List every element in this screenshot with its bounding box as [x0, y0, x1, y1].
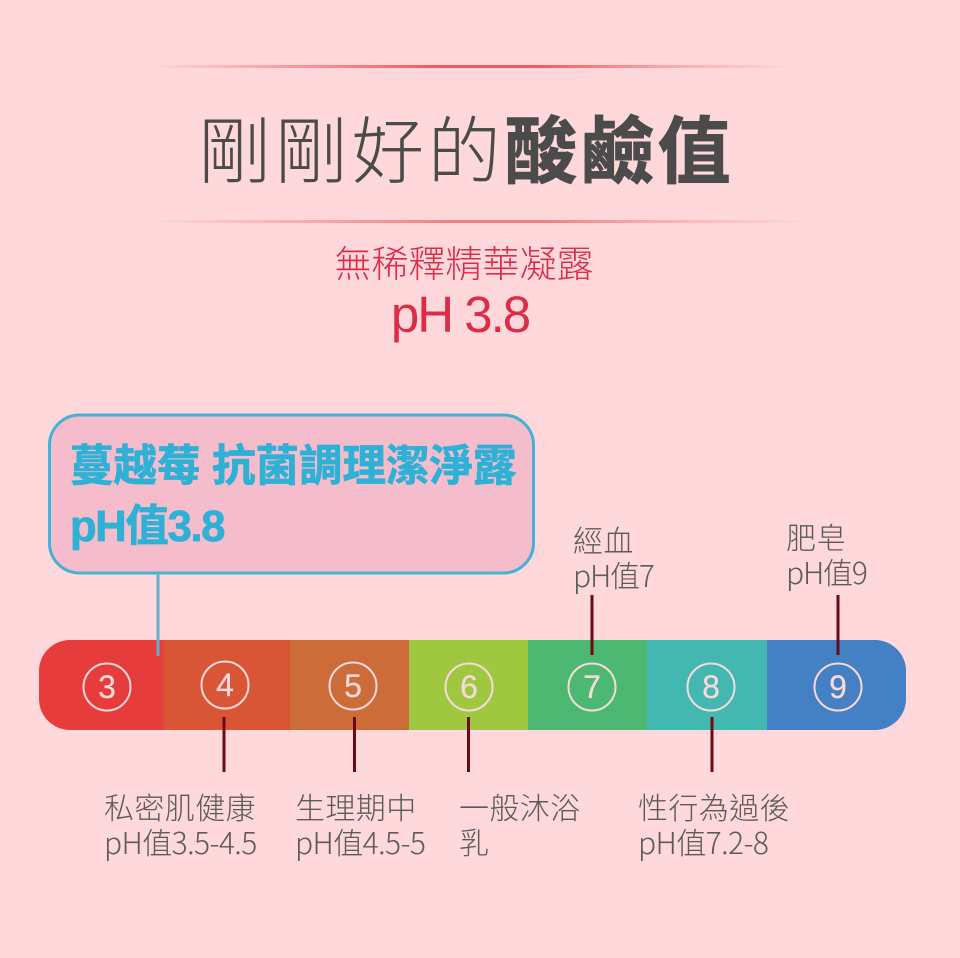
pointer: body wash — [467, 717, 470, 772]
label: intimate skin pH 3.5-4.5: 私密肌健康 — [104, 784, 256, 828]
label: after sex pH 7.2-8: pH值7.2-8 — [638, 819, 768, 863]
label: during period pH 4.5-5: pH值4.5-5 — [295, 819, 425, 863]
pointer: during period — [353, 717, 356, 772]
label: during period pH 4.5-5: 生理期中 — [295, 784, 417, 828]
scale mark 7: 7 — [583, 669, 601, 705]
label: after sex pH 7.2-8: 性行為過後 — [638, 784, 790, 828]
callout heading: 蔓越莓 — [70, 443, 200, 491]
callout heading: 抗菌調理潔淨露 — [212, 443, 516, 491]
label: body wash: 乳 — [459, 819, 489, 863]
pointer: soap — [836, 595, 840, 655]
scale mark 6 — [446, 664, 492, 710]
scale mark 5 — [330, 662, 376, 710]
label: menstrual blood pH 7: pH值7 — [573, 552, 654, 596]
callout connector — [156, 573, 160, 656]
pointer: after sex — [710, 717, 714, 772]
label: menstrual blood pH 7: 經血 — [573, 517, 634, 561]
product pH value: pH 3.8 — [391, 286, 530, 343]
pointer: intimate skin — [222, 717, 226, 772]
scale mark 7 — [568, 664, 616, 710]
label: soap pH 9: 肥皂 — [786, 514, 847, 558]
scale mark 8 — [688, 664, 734, 710]
scale mark 5: 5 — [344, 668, 362, 704]
scale mark 4 — [202, 662, 248, 708]
title: 剛剛好的酸鹼值 — [198, 112, 734, 193]
pointer: menstrual blood — [590, 595, 594, 655]
scale mark 3 — [84, 664, 130, 710]
label: intimate skin pH 3.5-4.5: pH值3.5-4.5 — [104, 819, 257, 863]
scale mark 3: 3 — [98, 669, 116, 705]
pH scale bar — [39, 640, 906, 730]
scale mark 9 — [814, 664, 862, 710]
scale mark 9: 9 — [829, 669, 847, 705]
label: soap pH 9: pH值9 — [786, 549, 867, 593]
scale mark 6: 6 — [460, 669, 478, 705]
callout pH value: pH值3.8 — [70, 503, 224, 551]
label: body wash: 一般沐浴 — [459, 784, 581, 828]
scale mark 8: 8 — [702, 669, 720, 705]
subtitle: 無稀釋精華凝露 — [334, 244, 594, 285]
scale mark 4: 4 — [216, 667, 234, 703]
callout: cranberry cleanser — [50, 415, 534, 573]
